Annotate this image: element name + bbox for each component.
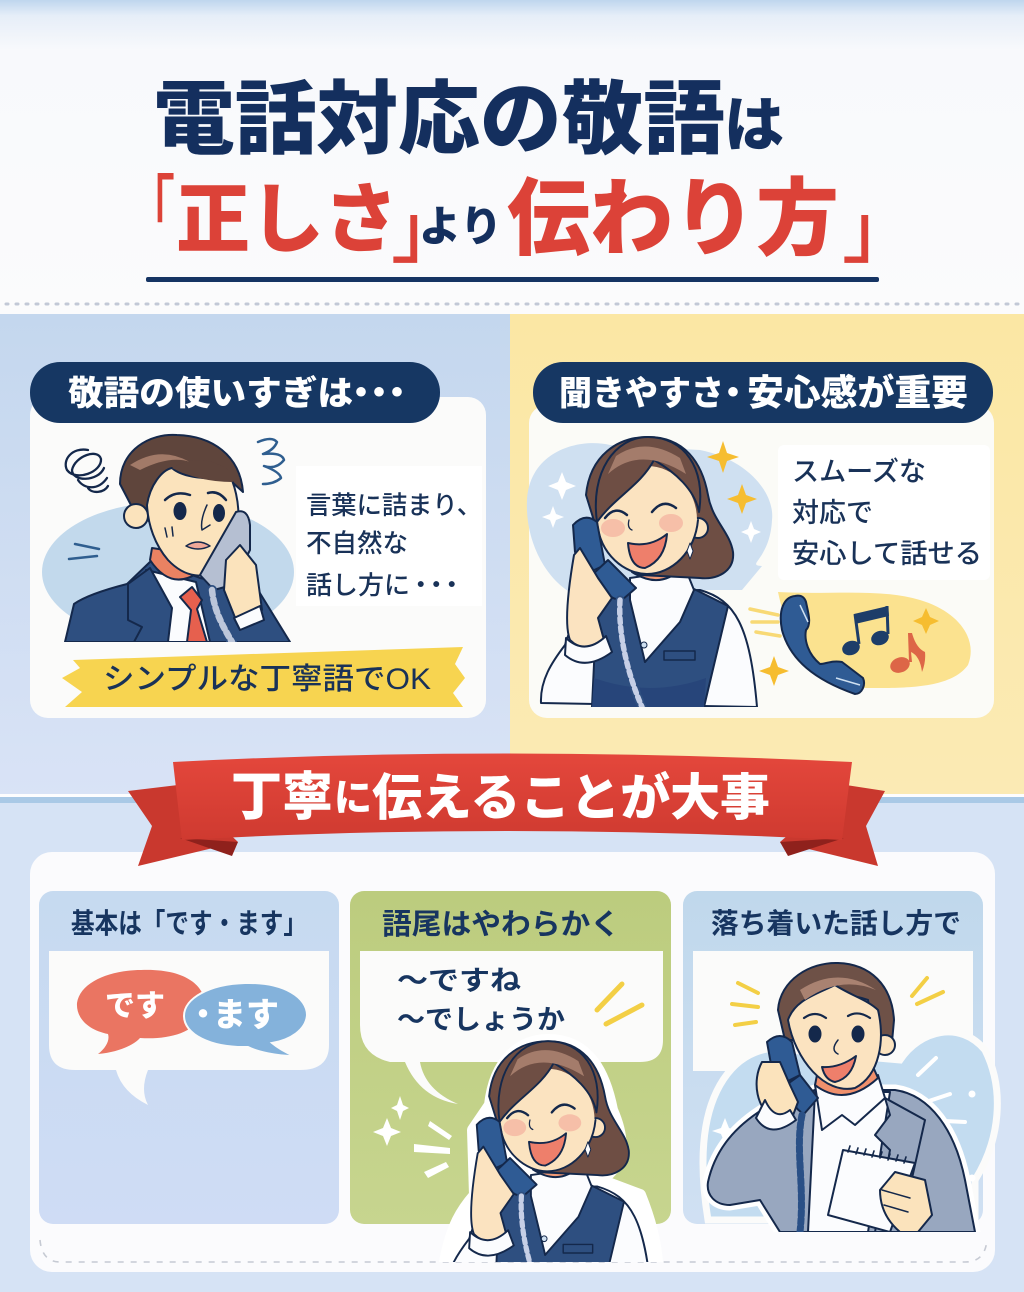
speech bubble [360, 951, 663, 1104]
bubble: desu: です [105, 990, 165, 1023]
panel heading: 基本は「です・ます」 [71, 908, 307, 939]
text block: right card: 対応で [792, 498, 873, 528]
heading pill: right [533, 362, 993, 423]
text block: left card: 言葉に詰まり、 [306, 492, 482, 520]
bubble text: 〜ですね [397, 966, 521, 996]
panel background [350, 891, 671, 1224]
blue cloud [703, 1032, 997, 1220]
panel: calm speech [683, 891, 997, 1232]
icon: music notes [840, 606, 925, 675]
text block: right card [778, 445, 990, 580]
title: 」 [391, 189, 465, 272]
speech bubble [49, 951, 329, 1105]
panel: right background [510, 314, 1024, 799]
title underline [146, 277, 879, 282]
panel: bottom white [30, 852, 995, 1272]
panel: right card [527, 362, 994, 718]
text block: left card: 話し方に [306, 572, 410, 600]
divider band [0, 794, 1024, 803]
blue cloud [527, 443, 772, 595]
text block: left card: 不自然な [306, 530, 408, 558]
text block: left card [296, 466, 482, 606]
bubble: masu: ます [213, 996, 279, 1033]
icon: smiling woman with white outline [442, 1040, 657, 1262]
text block: left card: ・・・ [408, 572, 455, 600]
icon: smiling woman [541, 437, 757, 707]
bubble text [397, 966, 565, 1035]
icon: motion lines [69, 544, 99, 559]
bottom background [0, 800, 1024, 1292]
banner text: に [334, 778, 372, 820]
yellow rays [597, 984, 642, 1024]
dashed inner line [40, 1240, 987, 1262]
panel: left card [30, 362, 486, 718]
title: 正しさ [176, 178, 398, 263]
ribbon tails [128, 785, 238, 866]
title: は [724, 92, 784, 159]
icon: tangled scribble [66, 450, 108, 492]
ribbon banner [128, 754, 885, 866]
icon: worried man [42, 435, 294, 642]
sparkles [759, 608, 939, 686]
sparkles blue [542, 472, 761, 543]
bubble: desu [77, 970, 205, 1054]
white area [693, 951, 973, 1071]
text block: right card: 安心して話せる [792, 539, 982, 569]
bubble: masu [184, 983, 307, 1056]
ribbon body [173, 754, 852, 840]
heading pill: left: 敬語の使いすぎは [68, 374, 353, 413]
heading pill: left: ・・・ [344, 375, 402, 413]
title: 電話対応の敬語 [153, 75, 725, 164]
card [30, 397, 486, 718]
icon: phone receiver [781, 596, 864, 694]
heading pill: right: 安心感が重要 [747, 372, 968, 413]
title: 」 [842, 189, 916, 272]
sparkles gold [707, 441, 757, 514]
white streaks [710, 1058, 976, 1190]
title: 「 [126, 169, 175, 255]
title: 伝わり方 [507, 172, 839, 266]
panel heading: 落ち着いた話し方で [711, 908, 961, 939]
sparkles and rays [373, 1096, 452, 1178]
icon: squiggle [258, 439, 284, 484]
card [529, 405, 994, 718]
callout: simple polite language ribbon: シンプルな丁寧語でOK [103, 663, 431, 696]
bubble text: 〜でしょうか [397, 1005, 565, 1035]
yellow blob [778, 592, 971, 688]
bubble: masu: ・ [188, 999, 218, 1032]
text block: right card: スムーズな [792, 457, 926, 487]
banner text: 丁寧 [231, 769, 333, 827]
header background band [0, 0, 1024, 314]
title [126, 75, 916, 272]
ribbon folds [180, 838, 238, 856]
heading pill: left [30, 362, 440, 423]
heading pill: right: ・ [716, 375, 750, 413]
icon: man with notepad [708, 963, 975, 1232]
motion lines [750, 609, 780, 636]
banner text: 伝えることが大事 [372, 770, 770, 826]
panel: left background [0, 314, 510, 799]
title: より [419, 203, 502, 250]
panel background [39, 891, 339, 1224]
heading pill: right: 聞きやすさ [559, 375, 724, 413]
panel heading: 語尾はやわらかく [382, 908, 620, 941]
panel: desu masu [39, 891, 339, 1224]
panel: soft endings [350, 891, 671, 1292]
rays [732, 978, 943, 1025]
callout: simple polite language ribbon [62, 647, 465, 707]
panel background [683, 891, 983, 1224]
